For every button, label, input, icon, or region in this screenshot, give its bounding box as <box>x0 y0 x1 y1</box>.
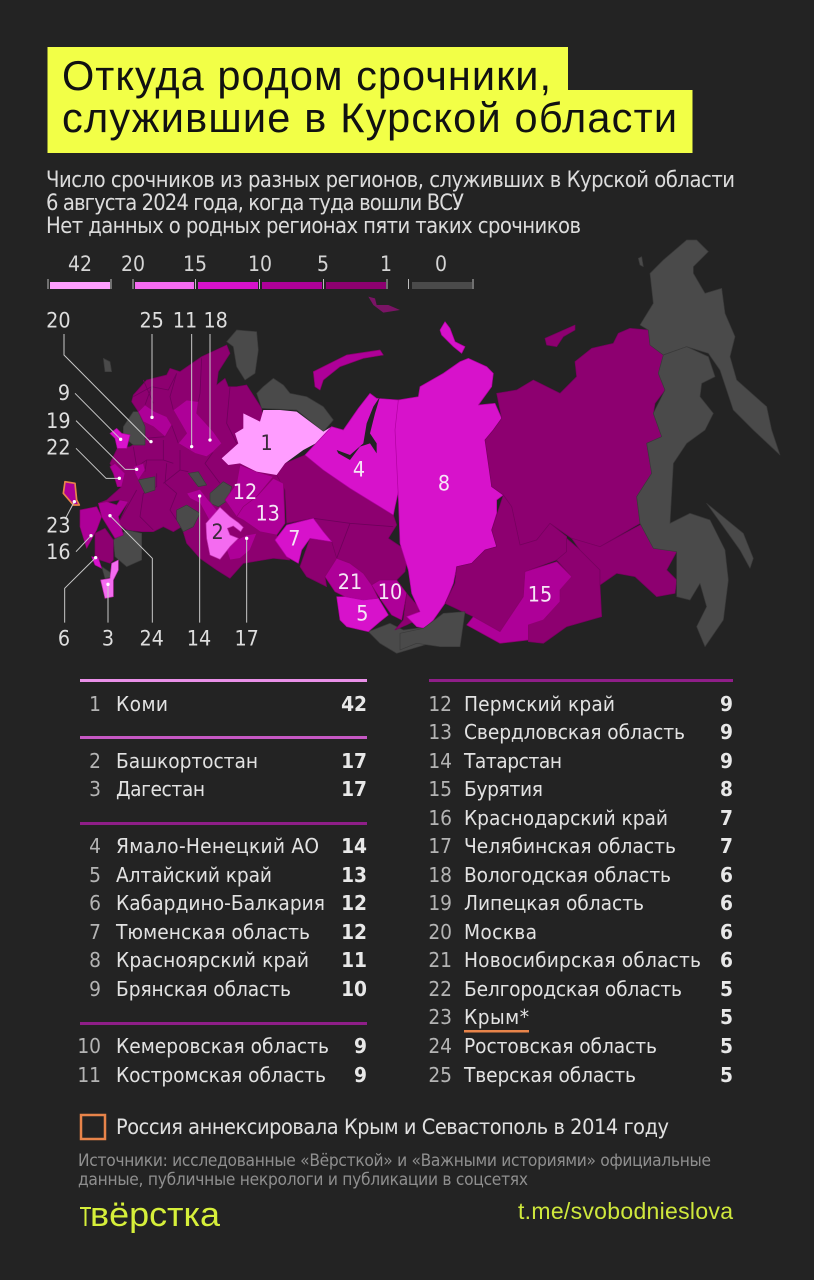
table: left column: 12 <box>341 920 367 944</box>
table: left column: 6 <box>89 891 101 915</box>
table: left column: 8 <box>89 948 101 972</box>
inner region numbers east: 15 <box>528 582 552 607</box>
outer region numbers: 9 <box>58 381 70 406</box>
Franz Josef Land <box>368 297 400 313</box>
inner region numbers: 13 <box>255 502 280 527</box>
table: left column: Красноярский край <box>116 948 309 972</box>
subtitle: 6 августа 2024 года, когда туда вошли ВСУ <box>46 191 464 216</box>
table: right column: 17 <box>428 834 452 858</box>
table: left column <box>77 679 367 1087</box>
table: right column: 7 <box>720 806 733 830</box>
outer region numbers: 23 <box>46 513 71 538</box>
outer region numbers: 25 <box>139 308 164 333</box>
table: right column: Вологодская область <box>464 863 671 887</box>
title: служившие в Курской области <box>62 94 677 141</box>
legend: 15 <box>183 252 207 276</box>
Region 23 Crimea <box>63 482 79 505</box>
outer region numbers: 3 <box>102 627 114 652</box>
table: right column: 22 <box>428 977 452 1001</box>
table: right column <box>428 679 733 1087</box>
map of Russia by region <box>46 240 780 653</box>
table: left column: Брянская область <box>116 977 291 1001</box>
table: left column: 9 <box>354 1063 367 1087</box>
legend: 1 <box>380 252 392 276</box>
Region 22 Belgorod <box>110 463 125 487</box>
region borders <box>120 358 237 530</box>
table: left column: 11 <box>77 1063 101 1087</box>
table: left column: Тюменская область <box>115 920 310 944</box>
outer region numbers <box>46 308 259 652</box>
table: left column: Костромская область <box>116 1063 326 1087</box>
Zabaikalye <box>528 538 602 643</box>
table: left column: 9 <box>354 1034 367 1058</box>
Region 19 Lipetsk <box>133 463 145 480</box>
Novaya Zemlya <box>313 350 383 390</box>
Region 9 Bryansk <box>110 428 130 448</box>
table: left column: 10 <box>341 977 367 1001</box>
Chukotka, Magadan, Kamchatka <box>640 240 780 455</box>
grey regions west <box>227 330 258 380</box>
title <box>48 47 692 153</box>
sources: Источники: исследованные «Вёрсткой» и «Важными историями» официальные <box>78 1151 711 1171</box>
table: left column: Алтайский край <box>116 863 272 887</box>
Severnaya Zemlya <box>440 322 465 353</box>
table: right column: 16 <box>428 806 452 830</box>
inner region numbers: 7 <box>288 527 300 552</box>
Region 5 Altai krai <box>337 597 388 632</box>
table: right column: 21 <box>428 948 452 972</box>
table: left column: 17 <box>341 749 367 773</box>
Region 13 Sverdlovsk <box>237 478 285 535</box>
table: left column: 7 <box>89 920 101 944</box>
outer region numbers: 19 <box>46 409 71 434</box>
table: right column: Татарстан <box>463 749 562 773</box>
table: left column: Кемеровская область <box>116 1034 329 1058</box>
Region 3 Dagestan <box>101 560 118 598</box>
inner region numbers: 12 <box>233 480 257 505</box>
table: right column: 9 <box>720 749 733 773</box>
inner region numbers east <box>438 472 552 607</box>
Wrangel Island <box>638 257 643 267</box>
table: right column: 24 <box>428 1034 452 1058</box>
Region 1 Komi <box>222 410 332 475</box>
West Siberia base <box>277 455 408 585</box>
legend: 5 <box>317 252 329 276</box>
table: left column: 3 <box>89 777 101 801</box>
table: right column: Краснодарский край <box>464 806 668 830</box>
table: left column: Башкортостан <box>116 749 258 773</box>
European Russia and Urals base <box>98 345 290 578</box>
outer region numbers: 20 <box>46 308 71 333</box>
table: right column: 6 <box>720 891 733 915</box>
table: right column: Тверская область <box>463 1063 636 1087</box>
legend: 20 <box>121 252 145 276</box>
Tuva and Altai grey <box>400 612 465 650</box>
Region 14 Tatarstan <box>187 489 218 522</box>
logo: вёрстка <box>90 1196 220 1234</box>
table: right column: 20 <box>428 920 452 944</box>
Sakhalin <box>707 503 753 568</box>
inner region numbers east: 8 <box>438 472 450 497</box>
table: right column: Пермский край <box>464 692 615 716</box>
Region 2 Bashkortostan <box>206 507 243 559</box>
Gulf of Ob <box>337 397 380 460</box>
Region 17 Chelyabinsk <box>227 533 257 560</box>
Region 18 Vologda and Region 11 Kostroma <box>173 400 222 457</box>
table: right column: 7 <box>720 834 733 858</box>
Region 7 Tyumen <box>275 518 332 563</box>
outer region numbers: 11 <box>173 308 197 333</box>
subtitle: Число срочников из разных регионов, служивших в Курской области <box>46 168 735 193</box>
Region 10 Kemerovo <box>372 580 407 620</box>
table: right column: Крым* <box>464 1005 529 1029</box>
Region 25 Tver <box>138 405 172 437</box>
inner region numbers: 2 <box>212 520 224 545</box>
New Siberian Islands <box>545 325 575 347</box>
Region 8 Krasnoyarsk <box>395 358 503 628</box>
table: right column: Челябинская область <box>464 834 676 858</box>
inner region numbers: 4 <box>353 458 365 483</box>
inner region numbers: 1 <box>261 431 273 456</box>
table: right column: 5 <box>720 977 733 1001</box>
inner region numbers: 21 <box>338 570 362 595</box>
table: right column: 5 <box>720 1034 733 1058</box>
table: left column: 1 <box>89 692 101 716</box>
table: right column: Бурятия <box>464 777 543 801</box>
table: right column: Свердловская область <box>464 720 685 744</box>
Omsk region <box>300 538 337 587</box>
table: right column: 23 <box>428 1005 452 1029</box>
inner region numbers: 10 <box>378 580 402 605</box>
table: left column: 11 <box>341 948 367 972</box>
table: right column: 5 <box>720 1005 733 1029</box>
outer region numbers: 18 <box>203 308 228 333</box>
table: left column: Коми <box>116 692 168 716</box>
table: left column: 2 <box>89 749 101 773</box>
inner region numbers: 5 <box>356 602 368 627</box>
title: Откуда родом срочники, <box>62 52 551 99</box>
table: right column: 8 <box>720 777 733 801</box>
sources: данные, публичные некрологи и публикации в соцсетях <box>78 1170 528 1190</box>
table: right column: Новосибирская область <box>464 948 701 972</box>
Region 21 Novosibirsk <box>325 558 378 600</box>
Khakassia <box>395 593 420 630</box>
table: left column: 42 <box>341 692 367 716</box>
table: left column: 10 <box>77 1034 101 1058</box>
table: right column: 5 <box>720 1063 733 1087</box>
outer region numbers: 24 <box>139 627 164 652</box>
Region 4 Yamalo-Nenets <box>305 393 403 515</box>
outer region numbers: 22 <box>46 436 71 461</box>
Region 24 Rostov <box>98 500 128 538</box>
table: right column: 14 <box>428 749 452 773</box>
annexation note: Россия аннексировала Крым и Севастополь в 2014 году <box>116 1115 669 1140</box>
Amur region <box>572 525 677 597</box>
table: right column: 19 <box>428 891 452 915</box>
table: right column: 12 <box>428 692 452 716</box>
table: left column: Ямало-Ненецкий АО <box>116 834 319 858</box>
table: right column: 13 <box>428 720 452 744</box>
table: right column: 9 <box>720 720 733 744</box>
sources <box>78 1151 711 1190</box>
Stavropol <box>95 528 113 563</box>
Irkutsk region <box>445 495 567 632</box>
table: right column: 6 <box>720 863 733 887</box>
legend: 10 <box>248 252 272 276</box>
table: right column: 6 <box>720 920 733 944</box>
table: left column: 9 <box>89 977 101 1001</box>
Region 6 Kabardino-Balkaria <box>92 557 102 568</box>
Khabarovsk and Primorye <box>637 347 728 647</box>
legend <box>48 252 473 289</box>
outer region numbers: 6 <box>58 627 70 652</box>
Region 16 Krasnodar <box>80 507 102 548</box>
outer region numbers: 16 <box>46 540 71 565</box>
table: left column: 12 <box>341 891 367 915</box>
leader lines <box>64 334 248 623</box>
subtitle <box>46 168 735 239</box>
Region 15 Buryatia <box>467 562 572 643</box>
table: left column: Кабардино-Балкария <box>116 891 325 915</box>
table: right column: 18 <box>428 863 452 887</box>
Yakutia <box>485 328 665 547</box>
table: right column: Ростовская область <box>464 1034 657 1058</box>
table: left column: 13 <box>341 863 367 887</box>
table: left column: 14 <box>341 834 367 858</box>
outer region numbers: 17 <box>234 627 259 652</box>
subtitle: Нет данных о родных регионах пяти таких срочников <box>46 214 581 239</box>
table: right column: Москва <box>464 920 537 944</box>
Region 12 Perm <box>225 465 273 517</box>
channel link: t.me/svobodnieslova <box>518 1198 733 1224</box>
table: right column: Липецкая область <box>464 891 644 915</box>
legend: 42 <box>68 252 92 276</box>
table: left column: 5 <box>89 863 101 887</box>
table: left column: Дагестан <box>116 777 205 801</box>
table: left column: 17 <box>341 777 367 801</box>
table: right column: 15 <box>428 777 452 801</box>
legend: 0 <box>435 252 447 276</box>
outer region numbers: 14 <box>187 627 211 652</box>
table: right column: Белгородская область <box>464 977 682 1001</box>
table: right column: 6 <box>720 948 733 972</box>
table: right column: 25 <box>428 1063 452 1087</box>
table: right column: 9 <box>720 692 733 716</box>
table: left column: 4 <box>89 834 101 858</box>
inner region numbers <box>212 431 402 627</box>
